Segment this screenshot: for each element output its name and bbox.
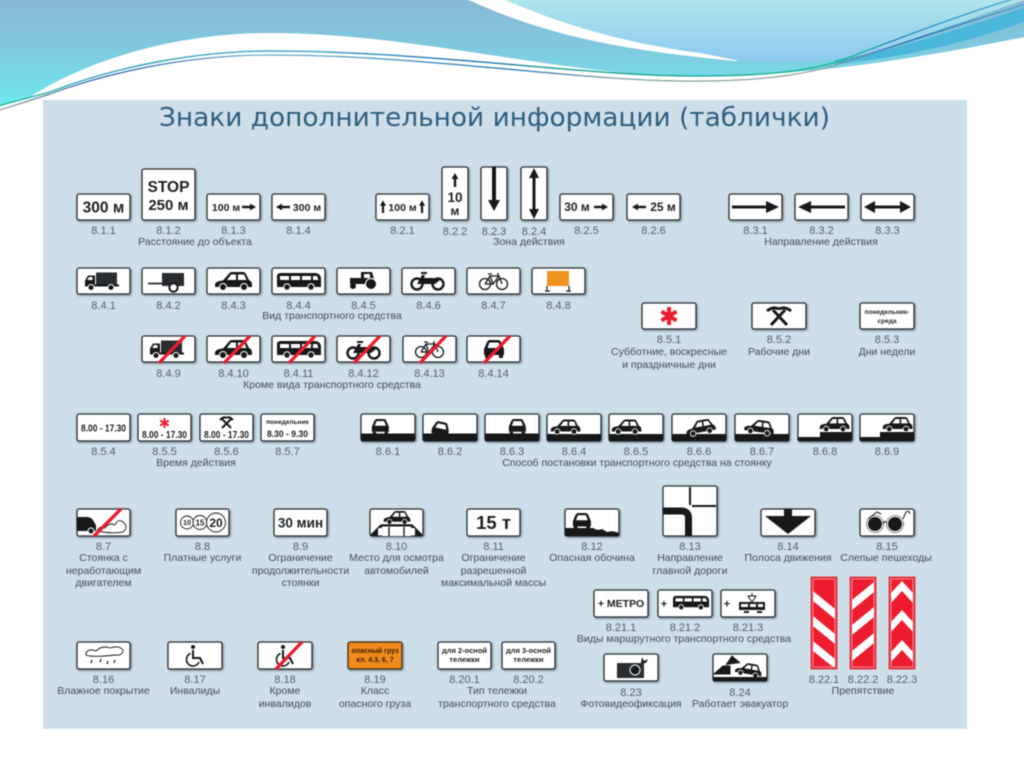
sign 8.10 <box>349 509 444 577</box>
sign 8.10: 8.10 <box>386 541 407 553</box>
sign 8.14: Полоса движения <box>744 552 832 564</box>
sign 8.5.4 <box>77 414 130 458</box>
sign 8.5.2 <box>748 303 810 358</box>
sign 8.9: 30 мин <box>278 516 323 530</box>
sign 8.3.3: 8.3.3 <box>875 225 900 237</box>
sign 8.16: Влажное покрытие <box>57 685 150 697</box>
sign 8.2.6: 25 м <box>650 200 676 214</box>
background wave: decorative header swoosh <box>0 0 1024 112</box>
sign 8.6.4 <box>547 414 601 458</box>
sign 8.5.1: и праздничные дни <box>622 359 716 371</box>
sign 8.21.3 <box>721 590 775 634</box>
sign 8.19: опасный груз <box>351 647 399 655</box>
sign 8.2.2: м <box>451 204 460 218</box>
sign 8.5.3: понедельник- <box>865 309 909 316</box>
sign 8.4.2: 8.4.2 <box>156 300 181 312</box>
sign 8.17: Инвалиды <box>170 685 220 697</box>
panel: sign table background <box>43 100 967 729</box>
group: 8.5 days <box>611 303 915 371</box>
sign 8.20.2 <box>502 642 555 686</box>
sign 8.23: Фотовидеофиксация <box>580 698 682 710</box>
sign 8.9 <box>252 509 349 589</box>
sign 8.11: разрешенной <box>461 565 526 577</box>
sign 8.23 <box>580 654 682 710</box>
sign 8.4.7: 8.4.7 <box>481 300 506 312</box>
sign 8.19: кл. 4.3, 6, 7 <box>356 657 394 664</box>
sign 8.2.1: 100 м <box>388 202 417 214</box>
sign 8.15: 8.15 <box>876 541 898 553</box>
sign 8.21.1: + МЕТРО <box>598 598 644 610</box>
sign 8.6.3 <box>485 414 539 458</box>
sign 8.2.5: 30 м <box>564 200 590 214</box>
sign 8.21.1: 8.21.1 <box>606 622 636 634</box>
sign 8.20.1: тележки <box>449 655 480 664</box>
group: 8.4 except vehicle type <box>142 336 520 391</box>
sign 8.2.4: 8.2.4 <box>522 226 546 238</box>
sign 8.24: Работает эвакуатор <box>692 698 788 710</box>
sign 8.5.4: 8.00 - 17.30 <box>81 422 126 434</box>
sign 8.14: 8.14 <box>777 541 799 553</box>
sign 8.4.5 <box>337 268 390 312</box>
caption: zone: Зона действия <box>493 236 565 248</box>
sign 8.2.4 <box>521 167 547 238</box>
sign 8.5.7 <box>261 414 314 458</box>
sign 8.4.2 <box>142 268 195 312</box>
caption: vehicle type: Вид транспортного средства <box>262 310 402 322</box>
caption: obstacle: Препятствие <box>832 685 894 697</box>
sign 8.4.9: 8.4.9 <box>156 368 181 380</box>
sign 8.6.2: 8.6.2 <box>438 446 462 458</box>
sign 8.22.2: 8.22.2 <box>848 674 878 686</box>
sign 8.16 <box>57 642 150 697</box>
sign 8.4.8: 8.4.8 <box>546 300 571 312</box>
sign 8.5.7: понедельник <box>266 419 309 426</box>
sign 8.6.6 <box>672 414 726 458</box>
sign 8.19: опасного груза <box>339 698 411 710</box>
sign 8.5.6 <box>200 414 253 458</box>
sign 8.4.4 <box>272 268 325 312</box>
sign 8.5.4: 8.5.4 <box>91 446 116 458</box>
sign 8.6.8: 8.6.8 <box>813 446 837 458</box>
sign 8.8: 20 <box>209 516 223 530</box>
sign 8.4.12: 8.4.12 <box>348 368 379 380</box>
sign 8.21.3: 8.21.3 <box>733 622 763 634</box>
sign 8.20.1: для 2-осной <box>442 646 487 655</box>
sign 8.4.6: 8.4.6 <box>416 300 441 312</box>
sign 8.3.3 <box>861 194 914 237</box>
group: 8.6 parking method <box>361 414 914 469</box>
sign 8.14 <box>744 509 832 564</box>
sign 8.7: Стоянка с <box>79 552 128 564</box>
sign 8.4.10 <box>207 336 260 380</box>
sign 8.1.1: 300 м <box>83 200 124 216</box>
sign 8.2.3: 8.2.3 <box>482 226 506 238</box>
sign 8.3.1 <box>729 194 782 237</box>
sign 8.23: 8.23 <box>620 687 642 699</box>
sign 8.6.3: 8.6.3 <box>500 446 524 458</box>
sign 8.2.1 <box>376 194 429 237</box>
sign 8.18: 8.18 <box>274 674 296 686</box>
sign 8.11: Ограничение <box>461 552 526 564</box>
sign 8.1.3: 8.1.3 <box>221 225 246 237</box>
sign 8.3.2 <box>795 194 848 237</box>
sign 8.9: Ограничение <box>268 552 333 564</box>
sign 8.19: 8.19 <box>364 674 386 686</box>
sign 8.18: Кроме <box>270 685 301 697</box>
sign 8.4.9 <box>142 336 195 380</box>
sign 8.6.9 <box>860 414 914 458</box>
sign 8.6.5 <box>609 414 663 458</box>
caption: direction: Направление действия <box>764 236 878 248</box>
sign 8.19 <box>339 642 411 710</box>
sign 8.7: неработающим <box>66 565 141 577</box>
sign 8.5.3: среда <box>878 318 897 325</box>
sign 8.20.2: тележки <box>513 655 544 664</box>
sign 8.5.3: Дни недели <box>859 346 915 358</box>
sign 8.5.5: 8.00 - 17.30 <box>142 430 187 441</box>
sign 8.20.2: для 3-осной <box>506 646 551 655</box>
sign 8.12 <box>549 509 635 564</box>
sign 8.2.6: 8.2.6 <box>641 225 666 237</box>
sign 8.1.4: 300 м <box>293 202 321 214</box>
sign 8.12: 8.12 <box>581 541 603 553</box>
sign 8.8 <box>164 509 241 564</box>
sign 8.6.9: 8.6.9 <box>875 446 899 458</box>
sign 8.9: стоянки <box>282 577 319 589</box>
sign 8.4.4: 8.4.4 <box>286 300 311 312</box>
sign 8.13 <box>653 486 728 577</box>
sign 8.2.1: 8.2.1 <box>390 225 415 237</box>
sign 8.1.2 <box>142 169 195 237</box>
sign 8.5.7: 8.5.7 <box>275 446 300 458</box>
group: 8.22 obstacle <box>809 577 917 697</box>
sign 8.11 <box>441 509 546 589</box>
sign 8.20.1 <box>438 642 491 686</box>
sign 8.4.1: 8.4.1 <box>91 300 116 312</box>
caption: bogie type: транспортного средства <box>438 698 556 710</box>
sign 8.4.8 <box>532 268 585 312</box>
sign 8.15: Слепые пешеходы <box>840 552 932 564</box>
sign 8.5.5: 8.5.5 <box>152 446 177 458</box>
sign 8.13: 8.13 <box>679 541 701 553</box>
sign 8.8: 15 <box>196 518 205 528</box>
sign 8.4.3: 8.4.3 <box>221 300 246 312</box>
sign 8.1.3: 100 м <box>212 202 240 214</box>
caption: time of action: Время действия <box>156 457 236 469</box>
sign 8.10: Место для осмотра <box>349 552 444 564</box>
sign 8.4.12 <box>337 336 390 380</box>
caption: distance: Расстояние до объекта <box>138 236 252 248</box>
sign 8.5.3 <box>859 303 915 358</box>
sign 8.1.1: 8.1.1 <box>91 225 116 237</box>
group: signs 8.7 to 8.15 <box>66 486 932 589</box>
sign 8.4.3 <box>207 268 260 312</box>
sign 8.7 <box>66 509 141 589</box>
sign 8.4.13 <box>403 336 456 380</box>
group: 8.1 distance to object <box>77 169 325 248</box>
caption: route vehicles: Виды маршрутного транспортного средства <box>577 633 791 645</box>
sign 8.20.1: 8.20.1 <box>449 674 480 686</box>
sign 8.22.1: 8.22.1 <box>809 674 839 686</box>
sign 8.2.2 <box>442 167 468 238</box>
sign 8.4.6 <box>402 268 455 312</box>
group: 8.5 time of action <box>77 414 314 469</box>
sign 8.21.2: 8.21.2 <box>670 622 700 634</box>
sign 8.18: инвалидов <box>259 698 312 710</box>
sign 8.21.2 <box>658 590 712 634</box>
sign 8.6.8 <box>798 414 852 458</box>
group: bottom row signs <box>57 642 788 710</box>
sign 8.7: двигателем <box>75 577 132 589</box>
sign 8.5.1: 8.5.1 <box>657 334 681 346</box>
sign 8.21.2: + <box>661 598 667 610</box>
sign 8.4.7 <box>467 268 520 312</box>
sign 8.4.5: 8.4.5 <box>351 300 376 312</box>
sign 8.2.2: 8.2.2 <box>443 226 467 238</box>
sign 8.2.6 <box>627 194 680 237</box>
sign 8.5.5 <box>138 414 191 458</box>
sign 8.21.1 <box>594 590 648 634</box>
sign 8.1.2: 250 м <box>148 197 189 214</box>
sign 8.7: 8.7 <box>96 541 111 553</box>
sign 8.5.1: Субботние, воскресные <box>611 346 727 358</box>
sign 8.6.7 <box>735 414 789 458</box>
sign 8.4.11 <box>272 336 325 380</box>
sign 8.5.3: 8.5.3 <box>875 334 899 346</box>
sign 8.6.7: 8.6.7 <box>750 446 774 458</box>
sign 8.5.6: 8.00 - 17.30 <box>204 430 249 441</box>
sign 8.4.13: 8.4.13 <box>414 368 445 380</box>
sign 8.12: Опасная обочина <box>549 552 635 564</box>
sign 8.8: Платные услуги <box>164 552 241 564</box>
sign 8.19: Класс <box>361 685 389 697</box>
sign 8.5.6: 8.5.6 <box>214 446 239 458</box>
sign 8.4.11: 8.4.11 <box>284 368 313 380</box>
sign 8.3.1: 8.3.1 <box>743 225 768 237</box>
sign 8.5.7: 8.30 - 9.30 <box>267 429 308 440</box>
sign 8.1.2: STOP <box>148 179 189 196</box>
sign 8.4.1 <box>77 268 130 312</box>
sign 8.1.3 <box>207 194 260 237</box>
sign 8.5.2: Рабочие дни <box>748 346 810 358</box>
sign 8.8: 10 <box>183 520 191 527</box>
title: Знаки дополнительной информации (таблички) <box>159 103 830 133</box>
sign 8.21.3: + <box>724 598 730 610</box>
sign 8.1.4: 8.1.4 <box>286 225 311 237</box>
sign 8.4.10: 8.4.10 <box>218 368 249 380</box>
sign 8.2.3 <box>481 167 507 238</box>
sign 8.5.2: 8.5.2 <box>767 334 791 346</box>
sign 8.2.2: 10 <box>447 190 463 205</box>
sign 8.6.2 <box>423 414 477 458</box>
sign 8.6.4: 8.6.4 <box>562 446 586 458</box>
sign 8.8: 8.8 <box>195 541 210 553</box>
sign 8.24: 8.24 <box>729 687 751 699</box>
sign 8.13: Направление <box>657 552 723 564</box>
sign 8.11: максимальной массы <box>441 577 546 589</box>
caption: parking method: Способ постановки транспортного средства на стоянку <box>502 457 772 469</box>
sign 8.6.1: 8.6.1 <box>376 446 400 458</box>
sign 8.4.14 <box>467 336 520 380</box>
sign 8.9: продолжительности <box>252 565 349 577</box>
sign 8.1.1 <box>77 194 130 237</box>
group: 8.2 action zone <box>376 167 680 248</box>
sign 8.4.14: 8.4.14 <box>478 368 509 380</box>
sign 8.17: 8.17 <box>184 674 206 686</box>
sign 8.5.1 <box>611 303 727 371</box>
sign 8.9: 8.9 <box>293 541 308 553</box>
sign 8.17 <box>168 642 222 697</box>
caption: bogie type: Тип тележки <box>467 685 527 697</box>
sign 8.15 <box>840 509 932 564</box>
sign 8.6.5: 8.6.5 <box>624 446 648 458</box>
sign 8.20.2: 8.20.2 <box>513 674 544 686</box>
sign 8.13: главной дороги <box>653 565 728 577</box>
sign 8.22.3: 8.22.3 <box>887 674 917 686</box>
caption: bogie type <box>438 685 556 710</box>
group: 8.3 direction of action <box>729 194 914 248</box>
sign 8.10: автомобилей <box>364 565 429 577</box>
caption: except vehicle type: Кроме вида транспортного средства <box>243 379 421 391</box>
sign 8.1.4 <box>272 194 325 237</box>
sign 8.2.5: 8.2.5 <box>574 225 599 237</box>
group: 8.21 route vehicles <box>577 590 791 645</box>
sign 8.11: 15 т <box>476 512 511 533</box>
sign 8.2.5 <box>560 194 613 237</box>
sign 8.6.1 <box>361 414 415 458</box>
sign 8.1.2: 8.1.2 <box>156 225 181 237</box>
sign 8.3.2: 8.3.2 <box>809 225 834 237</box>
sign 8.18 <box>258 642 312 710</box>
sign 8.11: 8.11 <box>483 541 504 553</box>
sign 8.6.6: 8.6.6 <box>687 446 711 458</box>
sign 8.16: 8.16 <box>93 674 114 686</box>
sign 8.24 <box>692 654 788 710</box>
group: 8.4 vehicle type <box>77 268 585 322</box>
